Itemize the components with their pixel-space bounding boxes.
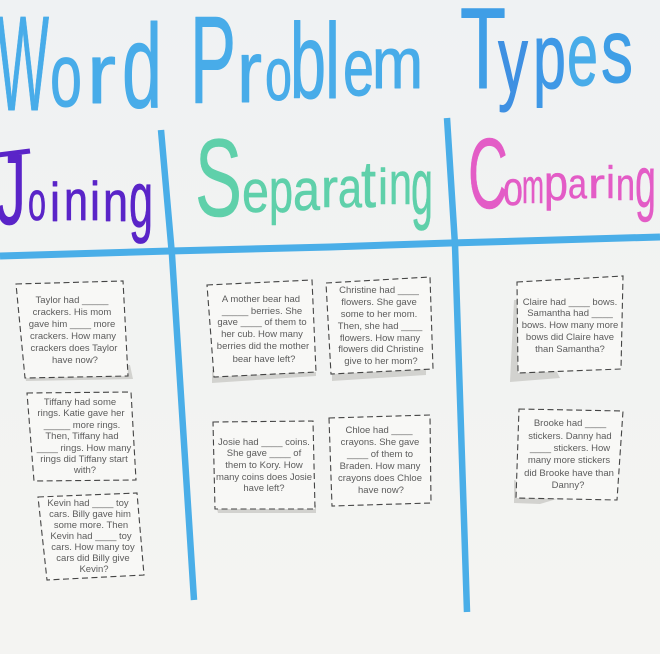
title: Word Problem Types	[0, 0, 633, 139]
card: Josie (separating): them to Kory. How	[225, 460, 303, 471]
card: Brooke (comparing): stickers. Danny had	[528, 431, 612, 442]
card: Claire (comparing): bows did Claire have	[526, 332, 614, 343]
card: Kevin (joining): Kevin had ____ toy	[50, 531, 132, 542]
title: Word Problem Types: m	[372, 24, 423, 104]
title: Word Problem Types: r	[87, 27, 116, 122]
heading: Comparing: p	[544, 155, 568, 211]
title: Word Problem Types: l	[325, 1, 340, 121]
card: Taylor (joining): crackers. How many	[30, 331, 116, 342]
heading: Joining: g	[129, 155, 153, 244]
heading: Joining	[0, 134, 153, 246]
heading: Separating: r	[321, 157, 338, 219]
heading: Separating: e	[242, 158, 269, 225]
card: Christine (separating): flowers. She gave	[341, 297, 417, 308]
heading: Comparing: m	[522, 161, 544, 214]
card: Tiffany (joining): Then, Tiffany had	[45, 431, 119, 442]
card: Claire (comparing): Claire had ____ bows.	[523, 297, 617, 308]
heading: Comparing: o	[503, 163, 523, 216]
card: mother bear (separating): berries did the mother	[217, 341, 309, 352]
card: Kevin (joining): Kevin had ____ toy	[47, 498, 129, 509]
card: Kevin (joining): cars. Billy gave him	[49, 509, 131, 520]
heading: Comparing: a	[568, 160, 588, 207]
card: Tiffany (joining)	[27, 392, 136, 481]
card: Kevin (joining): Kevin?	[79, 564, 109, 575]
card: Tiffany (joining): ____ rings. How many	[36, 443, 132, 454]
card: Brooke (comparing): Danny?	[552, 480, 584, 491]
card: Christine (separating): Christine had ____	[339, 285, 420, 296]
card: mother bear (separating): gave ____ of them to	[217, 317, 307, 328]
title: Word Problem Types: s	[601, 2, 633, 102]
heading: Joining: i	[50, 171, 60, 233]
heading: Joining: o	[28, 170, 46, 232]
card: Taylor (joining)	[16, 281, 133, 381]
card: Josie (separating): many coins does Josie	[216, 472, 312, 483]
card: Christine (separating)	[326, 277, 433, 381]
card: Taylor (joining): have now?	[52, 355, 98, 366]
title: Word Problem Types: e	[567, 5, 598, 105]
card: Tiffany (joining): rings did Tiffany start	[40, 454, 128, 465]
title: Word Problem Types: d	[122, 0, 162, 133]
card: Tiffany (joining): _____ more rings.	[43, 420, 120, 431]
card: Kevin (joining): cars. How many toy	[51, 542, 135, 553]
heading: Comparing: n	[616, 159, 635, 210]
heading: Separating: a	[293, 158, 321, 223]
heading: Separating: p	[269, 157, 293, 226]
card: Josie (separating)	[213, 421, 316, 513]
card: Chloe (separating): Chloe had ____	[345, 425, 413, 436]
title: Word Problem Types: r	[237, 22, 262, 121]
title: Word Problem Types: y	[498, 6, 528, 113]
card: Taylor (joining): gave him ____ more	[29, 319, 115, 330]
heading: Separating	[195, 117, 433, 240]
column grid lines	[0, 118, 660, 612]
card: Taylor (joining): Taylor had _____	[36, 295, 109, 306]
heading: Joining: n	[103, 170, 128, 234]
card: Christine (separating): some to her mom.	[341, 309, 417, 320]
card: mother bear (separating): A mother bear had	[222, 294, 300, 305]
card: Taylor (joining): crackers. His mom	[33, 307, 111, 318]
card: Claire (comparing): than Samantha?	[535, 344, 605, 355]
card: Brooke (comparing): Brooke had ____	[534, 418, 607, 429]
card: mother bear (separating): her cub. How many	[221, 329, 303, 340]
card: Claire (comparing): bows. How many more	[522, 320, 618, 331]
card: Josie (separating): Josie had ____ coins.	[218, 437, 310, 448]
title: Word Problem Types: p	[533, 4, 566, 108]
card: Chloe (separating): ____ of them to	[346, 449, 413, 460]
heading: Comparing	[468, 118, 656, 230]
heading: Joining: i	[90, 170, 100, 232]
heading: Separating: n	[389, 150, 412, 217]
card: Kevin (joining)	[38, 493, 144, 580]
card: Claire (comparing): Samantha had ____	[527, 308, 613, 319]
card: Brooke (comparing)	[514, 409, 623, 504]
card: Christine (separating): flowers. How many	[340, 333, 420, 344]
card: Christine (separating): Then, she had ____	[338, 321, 423, 332]
card: Chloe (separating)	[329, 415, 431, 506]
card: Claire (comparing)	[510, 276, 623, 382]
card: Brooke (comparing): many more stickers	[528, 455, 610, 466]
card: Brooke (comparing): did Brooke have than	[524, 468, 614, 479]
card: Kevin (joining): cars did Billy give	[56, 553, 130, 564]
card: Josie (separating): have left?	[243, 483, 285, 494]
card: mother bear (separating): bear have left?	[233, 354, 295, 365]
card: mother bear (separating): _____ berries. She	[221, 306, 302, 317]
title: Word Problem Types: o	[50, 26, 82, 126]
text: g	[411, 142, 433, 231]
heading: Joining: n	[64, 169, 88, 233]
card: Chloe (separating): crayons. She gave	[341, 437, 419, 448]
card: Taylor (joining): crackers does Taylor	[31, 343, 117, 354]
card: Chloe (separating): crayons does Chloe	[338, 473, 422, 484]
heading: Comparing: C	[468, 118, 508, 230]
title: Word Problem Types: e	[343, 22, 374, 113]
card: Tiffany (joining): with?	[73, 465, 96, 476]
card: mother bear (separating)	[207, 280, 316, 383]
card: Tiffany (joining): rings. Katie gave her	[37, 408, 125, 419]
title: Word Problem Types: o	[265, 32, 292, 116]
card: Chloe (separating): Braden. How many	[340, 461, 421, 472]
card: Christine (separating): flowers did Christine	[338, 344, 424, 355]
heading: Comparing: r	[588, 160, 605, 207]
heading: Separating: S	[195, 117, 242, 240]
card: Tiffany (joining): Tiffany had some	[44, 397, 116, 408]
card: Brooke (comparing): ____ stickers. How	[529, 443, 610, 454]
card: Josie (separating): She gave ____ of	[227, 448, 302, 459]
card: Christine (separating): give to her mom?	[344, 356, 418, 367]
heading: Separating: i	[378, 159, 388, 215]
card: Kevin (joining): some more. Then	[54, 520, 128, 531]
heading: Separating: t	[361, 147, 376, 221]
heading: Comparing: i	[606, 157, 615, 208]
card: Chloe (separating): have now?	[358, 485, 404, 496]
heading: Separating: a	[338, 156, 362, 220]
title: Word Problem Types: b	[290, 1, 326, 121]
